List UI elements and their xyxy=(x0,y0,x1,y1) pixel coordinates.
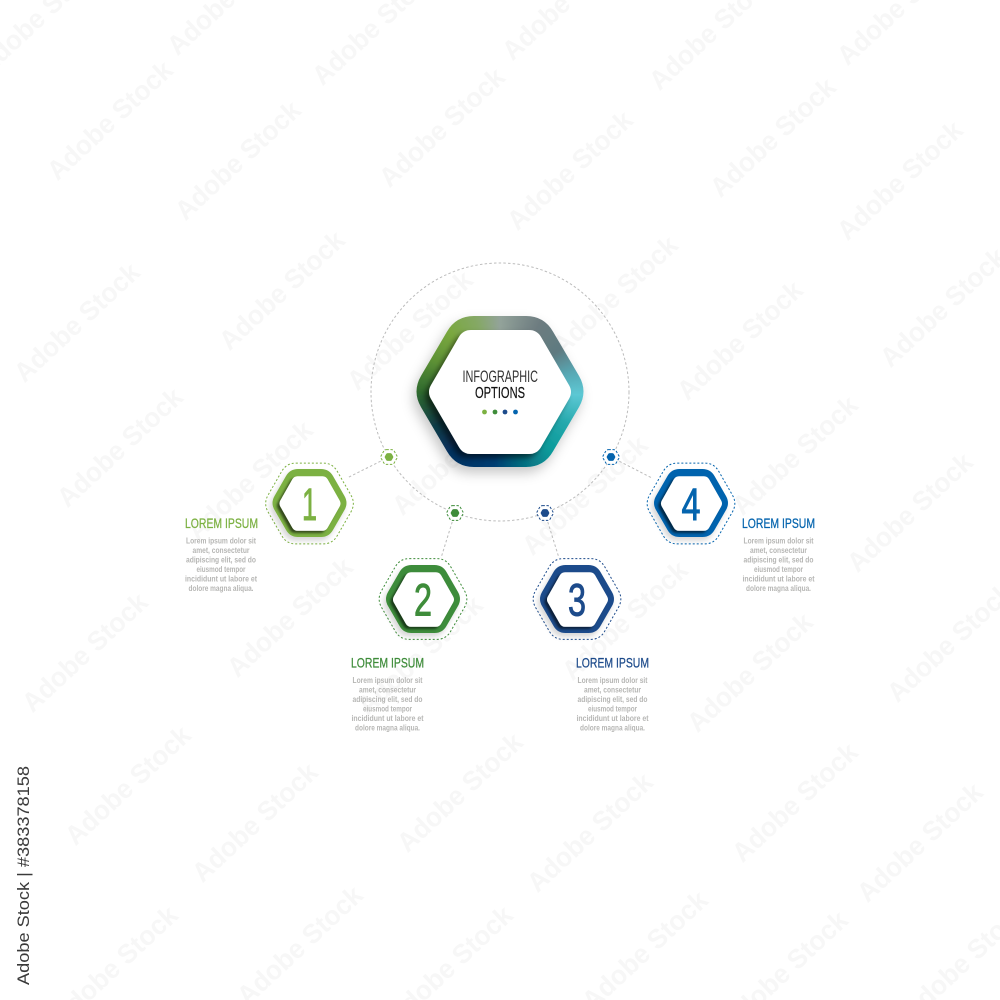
text block 1: dolore magna aliqua. xyxy=(188,583,254,593)
background watermark: Adobe Stock xyxy=(704,71,842,203)
text block 1: amet, consectetur xyxy=(192,545,250,555)
text block 2: adipiscing elit, sed do xyxy=(352,694,422,704)
option 2 xyxy=(351,559,467,732)
four colour dots xyxy=(482,410,518,414)
heading xyxy=(462,368,538,402)
hexagon 3 xyxy=(533,559,621,639)
node dot 3 xyxy=(537,506,553,520)
background watermark: Adobe Stock xyxy=(726,389,864,521)
node dot 4 xyxy=(603,450,619,464)
text block 1: incididunt ut labore et xyxy=(185,574,257,584)
text block 3: eiusmod tempor xyxy=(588,704,638,714)
background watermark: Adobe Stock xyxy=(681,606,819,738)
central hexagon xyxy=(408,316,586,479)
node dot 1 xyxy=(381,450,397,464)
hexagon 4 xyxy=(647,463,735,544)
background watermark: Adobe Stock xyxy=(213,224,351,356)
text block 1: Lorem ipsum dolor sit xyxy=(186,536,256,546)
background watermark: Adobe Stock xyxy=(851,776,989,908)
background watermark: Adobe Stock xyxy=(341,264,479,396)
hexagon 2: 2 xyxy=(414,574,432,626)
text block 2: Lorem ipsum dolor sit xyxy=(352,675,423,685)
text block 2: dolore magna aliqua. xyxy=(355,722,420,732)
background watermark: Adobe Stock xyxy=(386,389,524,521)
background watermark: Adobe Stock xyxy=(671,274,809,406)
background watermark: Adobe Stock xyxy=(41,54,179,186)
text block 4: eiusmod tempor xyxy=(754,564,804,574)
gradient ring xyxy=(408,316,586,479)
stock id label: Adobe Stock | #383378158 xyxy=(14,766,33,985)
background watermark: Adobe Stock xyxy=(8,256,146,388)
background watermark: Adobe Stock xyxy=(726,736,864,868)
background watermark: Adobe Stock xyxy=(516,429,654,561)
background watermark: Adobe Stock xyxy=(831,114,969,246)
heading: OPTIONS xyxy=(475,385,525,402)
text block 3: dolore magna aliqua. xyxy=(580,722,645,732)
text block 3: Lorem ipsum dolor sit xyxy=(578,675,648,685)
background watermark: Adobe Stock xyxy=(501,104,639,236)
hexagon 2 xyxy=(379,559,467,639)
text block 3: incididunt ut labore et xyxy=(576,713,649,723)
dashed connector lines xyxy=(347,457,652,558)
title 3: LOREM IPSUM xyxy=(576,654,649,670)
text block 3 xyxy=(576,675,649,732)
option 3 xyxy=(533,559,649,732)
heading: INFOGRAPHIC xyxy=(462,368,538,386)
text block 3: adipiscing elit, sed do xyxy=(578,694,648,704)
background watermark: Adobe Stock xyxy=(521,766,659,898)
text block 4: amet, consectetur xyxy=(750,545,808,555)
text block 4: dolore magna aliqua. xyxy=(746,583,811,593)
text block 4: adipiscing elit, sed do xyxy=(744,554,814,564)
text block 3: amet, consectetur xyxy=(584,684,642,694)
background watermark: Adobe Stock xyxy=(373,61,511,193)
text block 2: eiusmod tempor xyxy=(363,704,413,714)
background watermark: Adobe Stock xyxy=(51,381,189,513)
hexagon 1 xyxy=(266,463,353,544)
background watermark: Adobe Stock xyxy=(181,414,319,546)
text block 4: incididunt ut labore et xyxy=(742,574,815,584)
background watermark: Adobe Stock xyxy=(391,726,529,858)
background watermark: Adobe Stock xyxy=(351,589,489,721)
background watermark: Adobe Stock xyxy=(546,229,684,361)
text block 2 xyxy=(352,675,424,732)
text block 1: adipiscing elit, sed do xyxy=(186,554,256,564)
hexagon 3: 3 xyxy=(568,574,586,626)
option 4 xyxy=(647,463,815,593)
title 1: LOREM IPSUM xyxy=(185,515,258,531)
hexagon 1: 1 xyxy=(302,479,317,530)
text block 1 xyxy=(185,536,257,593)
text block 4 xyxy=(742,536,815,593)
dashed orbit circle xyxy=(371,263,629,521)
background watermark: Adobe Stock xyxy=(556,554,694,686)
background watermark: Adobe Stock xyxy=(16,586,154,718)
background watermark: Adobe Stock xyxy=(186,756,324,888)
background watermark: Adobe Stock xyxy=(221,551,359,683)
white inner hexagon xyxy=(429,330,571,454)
option 1 xyxy=(185,463,353,593)
text block 4: Lorem ipsum dolor sit xyxy=(744,536,814,546)
background watermark: Adobe Stock xyxy=(169,94,307,226)
text block 2: amet, consectetur xyxy=(359,684,417,694)
text block 2: incididunt ut labore et xyxy=(352,713,424,723)
background watermark: Adobe Stock xyxy=(59,719,197,851)
node dot 2 xyxy=(447,506,463,520)
title 4: LOREM IPSUM xyxy=(742,515,815,531)
title 2: LOREM IPSUM xyxy=(351,654,424,670)
hexagon 4: 4 xyxy=(682,479,700,530)
text block 1: eiusmod tempor xyxy=(196,564,246,574)
background watermark: Adobe Stock xyxy=(841,446,979,578)
